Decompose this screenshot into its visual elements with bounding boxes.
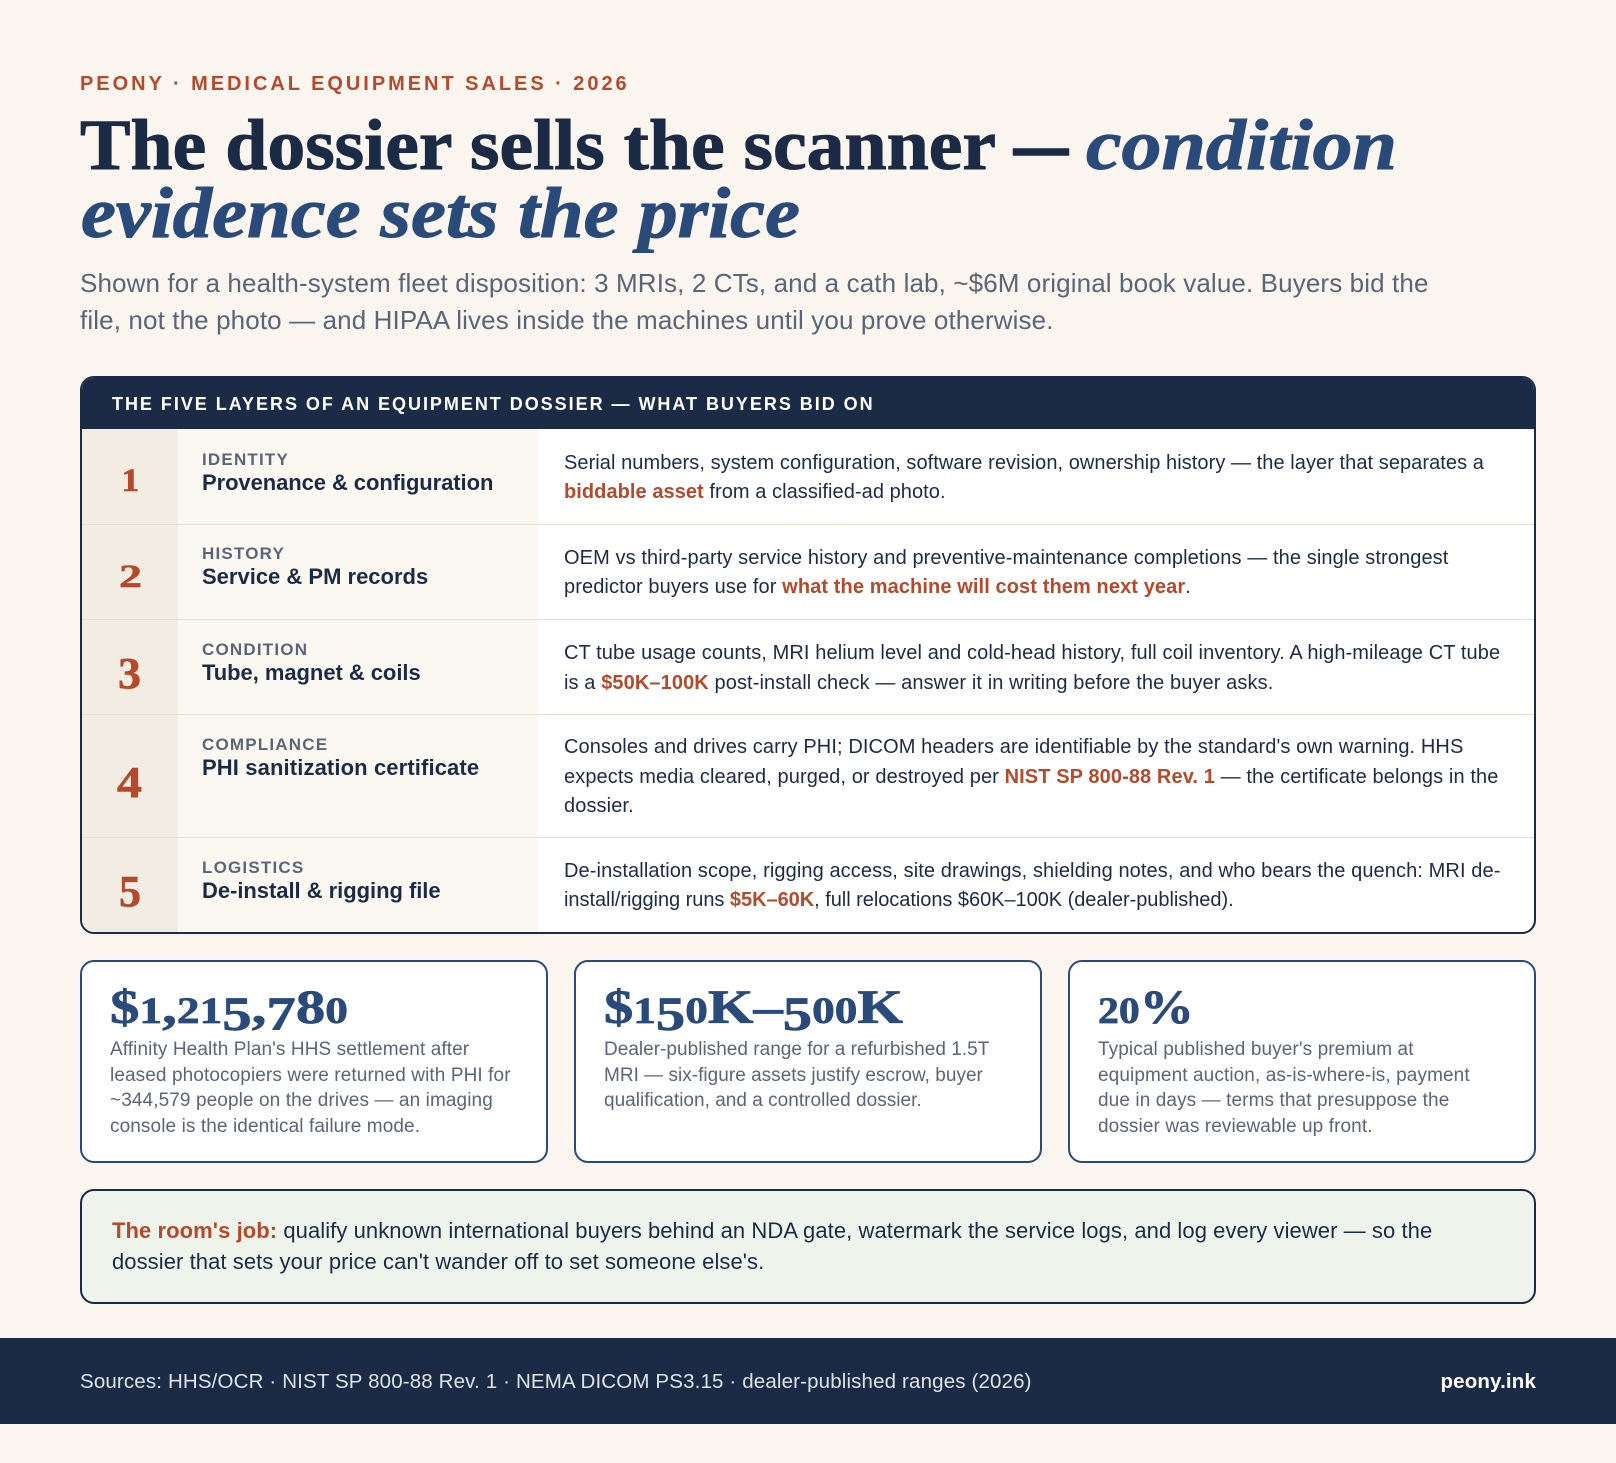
title bbox=[80, 105, 1397, 253]
subtitle: Shown for a health-system fleet disposition: 3 MRIs, 2 CTs, and a cath lab, ~$6M original book value. Buyers bid the bbox=[80, 268, 1429, 298]
description bbox=[564, 642, 1500, 694]
stat value: $1,21 bbox=[110, 981, 214, 1034]
description: predictor buyers use for what the machine will cost them next year. bbox=[564, 576, 1191, 598]
stat card: MRI range bbox=[574, 960, 1042, 1163]
stat description: ~344,579 people on the drives — an imaging bbox=[110, 1090, 493, 1111]
label: compliance: COMPLIANCE bbox=[202, 735, 328, 754]
row 4: compliance bbox=[82, 715, 1534, 838]
stat value bbox=[604, 981, 903, 1041]
description bbox=[564, 736, 1498, 817]
description: De-installation scope, rigging access, site drawings, shielding notes, and who bears the quench: MRI de- bbox=[564, 860, 1500, 882]
stat description bbox=[604, 1039, 989, 1111]
number 3: 3 bbox=[118, 649, 141, 698]
stat value: 00 bbox=[812, 991, 857, 1032]
callout: the room's job bbox=[80, 1189, 1536, 1304]
panel: five layers of an equipment dossier bbox=[80, 376, 1536, 934]
subtitle bbox=[80, 268, 1429, 334]
panel header: THE FIVE LAYERS OF AN EQUIPMENT DOSSIER — WHAT BUYERS BID ON bbox=[112, 394, 875, 414]
stat description: equipment auction, as-is-where-is, payment bbox=[1098, 1065, 1470, 1086]
stat description: dossier was reviewable up front. bbox=[1098, 1116, 1373, 1137]
callout text bbox=[112, 1218, 1432, 1274]
stat card: settlement bbox=[80, 960, 548, 1163]
description bbox=[564, 452, 1484, 503]
layer name: Tube, magnet & coils bbox=[202, 660, 421, 685]
number 2: 2 bbox=[119, 559, 142, 595]
description bbox=[564, 547, 1448, 598]
stat value: $1 bbox=[604, 981, 652, 1034]
stat description: Dealer-published range for a refurbished 1.5T bbox=[604, 1039, 989, 1060]
footer bbox=[0, 1338, 1616, 1424]
description: CT tube usage counts, MRI helium level and cold-head history, full coil inventory. A high-mileage CT tube bbox=[564, 642, 1500, 664]
number 5: 5 bbox=[119, 867, 141, 916]
stat description: Affinity Health Plan's HHS settlement after bbox=[110, 1039, 469, 1060]
row 2: history bbox=[82, 525, 1534, 620]
label: condition: CONDITION bbox=[202, 640, 308, 659]
description: biddable asset from a classified-ad photo. bbox=[564, 481, 946, 503]
layer name: PHI sanitization certificate bbox=[202, 755, 479, 780]
stat value: 0 bbox=[325, 991, 348, 1032]
description: is a $50K–100K post-install check — answer it in writing before the buyer asks. bbox=[564, 672, 1273, 694]
title: condition bbox=[1086, 105, 1397, 185]
stat description: MRI — six-figure assets justify escrow, buyer bbox=[604, 1065, 983, 1086]
row 3: condition bbox=[82, 620, 1534, 715]
panel header bbox=[82, 378, 1534, 429]
stat value: , bbox=[252, 981, 266, 1034]
stat value: 20% bbox=[1098, 981, 1194, 1034]
description: install/rigging runs $5K–60K, full relocations $60K–100K (dealer-published). bbox=[564, 889, 1234, 911]
title: evidence sets the price bbox=[81, 173, 800, 253]
row 5: logistics bbox=[82, 838, 1500, 932]
stat value: 7 bbox=[266, 988, 296, 1041]
stat value: 5 bbox=[656, 988, 685, 1041]
title: — bbox=[1013, 105, 1069, 185]
stat value: 8 bbox=[296, 981, 325, 1034]
description: expects media cleared, purged, or destroyed per NIST SP 800-88 Rev. 1 — the certificate belongs in the bbox=[564, 766, 1498, 788]
stat value: K bbox=[857, 981, 895, 1034]
description: Consoles and drives carry PHI; DICOM headers are identifiable by the standard's own warning. HHS bbox=[564, 736, 1463, 758]
stat value: K– bbox=[708, 981, 769, 1034]
number 1: 1 bbox=[121, 463, 139, 499]
number 4: 4 bbox=[117, 758, 142, 807]
stat value: 0 bbox=[685, 991, 708, 1032]
stat description: due in days — terms that presuppose the bbox=[1098, 1090, 1449, 1111]
stat description: leased photocopiers were returned with PHI for bbox=[110, 1065, 511, 1086]
layer name: Service & PM records bbox=[202, 564, 428, 589]
layer name: Provenance & configuration bbox=[202, 470, 493, 495]
stat value bbox=[110, 981, 348, 1041]
label: history: HISTORY bbox=[202, 544, 285, 563]
callout text: dossier that sets your price can't wander off to set someone else's. bbox=[112, 1249, 764, 1274]
subtitle: file, not the photo — and HIPAA lives inside the machines until you prove otherwise. bbox=[80, 304, 1054, 334]
layer name: De-install & rigging file bbox=[202, 878, 441, 903]
stat description: qualification, and a controlled dossier. bbox=[604, 1090, 922, 1111]
stat description: Typical published buyer's premium at bbox=[1098, 1039, 1414, 1060]
stat description: console is the identical failure mode. bbox=[110, 1116, 420, 1137]
callout text: The room's job: qualify unknown international buyers behind an NDA gate, watermark the service logs, and log every viewer — so the bbox=[112, 1218, 1432, 1243]
label: identity: IDENTITY bbox=[202, 450, 289, 469]
stat card: buyer's premium bbox=[1068, 960, 1536, 1163]
stat value: 5 bbox=[783, 988, 812, 1041]
description: OEM vs third-party service history and preventive-maintenance completions — the single strongest bbox=[564, 547, 1448, 569]
sources: Sources: HHS/OCR · NIST SP 800-88 Rev. 1 · NEMA DICOM PS3.15 · dealer-published ranges (2026) bbox=[80, 1370, 1032, 1393]
label: logistics: LOGISTICS bbox=[202, 858, 304, 877]
row 1: identity bbox=[82, 429, 1534, 525]
stat value: 5 bbox=[222, 988, 252, 1041]
eyebrow: PEONY · MEDICAL EQUIPMENT SALES · 2026 bbox=[80, 73, 630, 95]
brand: peony.ink bbox=[1440, 1370, 1536, 1393]
title: The dossier sells the scanner bbox=[80, 105, 996, 185]
description bbox=[564, 860, 1500, 911]
stat description bbox=[110, 1039, 511, 1137]
stat description bbox=[1098, 1039, 1470, 1137]
description: Serial numbers, system configuration, software revision, ownership history — the layer that separates a bbox=[564, 452, 1484, 474]
description: dossier. bbox=[564, 795, 634, 817]
